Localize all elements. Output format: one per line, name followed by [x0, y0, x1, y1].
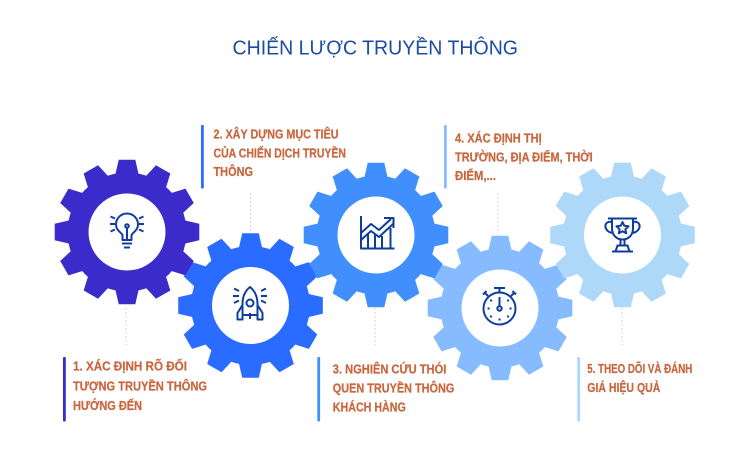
label 1	[63, 357, 207, 422]
label 5: 5. THEO DÕI VÀ ĐÁNH	[587, 361, 692, 376]
label 4	[444, 125, 593, 188]
label 5: GIÁ HIỆU QUẢ	[587, 380, 660, 395]
connector: gear 2 to label 2	[250, 193, 252, 232]
gear 4	[428, 236, 572, 380]
icon: growth chart	[361, 216, 394, 248]
label 3	[317, 357, 454, 422]
icon: trophy	[605, 218, 640, 252]
gear 2	[178, 233, 323, 378]
label 4: 4. XÁC ĐỊNH THỊ	[455, 130, 542, 145]
icon: light bulb	[110, 214, 144, 248]
label 4: ĐIỂM,...	[455, 168, 496, 183]
label 3: QUEN TRUYỀN THÔNG	[333, 380, 454, 395]
gear 3	[304, 163, 448, 307]
label 5	[577, 357, 692, 422]
label 3: 3. NGHIÊN CỨU THÓI	[333, 361, 446, 376]
label 4: TRƯỜNG, ĐỊA ĐIỂM, THỜI	[455, 150, 593, 164]
connector: gear 1 to label 1	[125, 308, 127, 345]
gear 5	[550, 163, 695, 307]
label 1: TƯỢNG TRUYỀN THÔNG	[73, 378, 207, 393]
gear 1	[55, 160, 199, 304]
connector: gear 3 to label 3	[374, 308, 376, 345]
label 2: CỦA CHIẾN DỊCH TRUYỀN	[214, 145, 346, 160]
label 2	[201, 125, 346, 188]
icon: rocket	[233, 287, 267, 320]
label 2: THÔNG	[214, 164, 253, 179]
label 1: 1. XÁC ĐỊNH RÕ ĐỐI	[73, 358, 187, 374]
connector: gear 4 to label 4	[497, 193, 499, 235]
label 2: 2. XÂY DỰNG MỤC TIÊU	[214, 126, 338, 142]
label 3: KHÁCH HÀNG	[333, 400, 406, 415]
icon: stopwatch	[483, 288, 516, 324]
label 1: HƯỚNG ĐẾN	[73, 398, 142, 413]
connector: gear 5 to label 5	[621, 308, 623, 345]
title: CHIẾN LƯỢC TRUYỀN THÔNG	[232, 36, 518, 60]
